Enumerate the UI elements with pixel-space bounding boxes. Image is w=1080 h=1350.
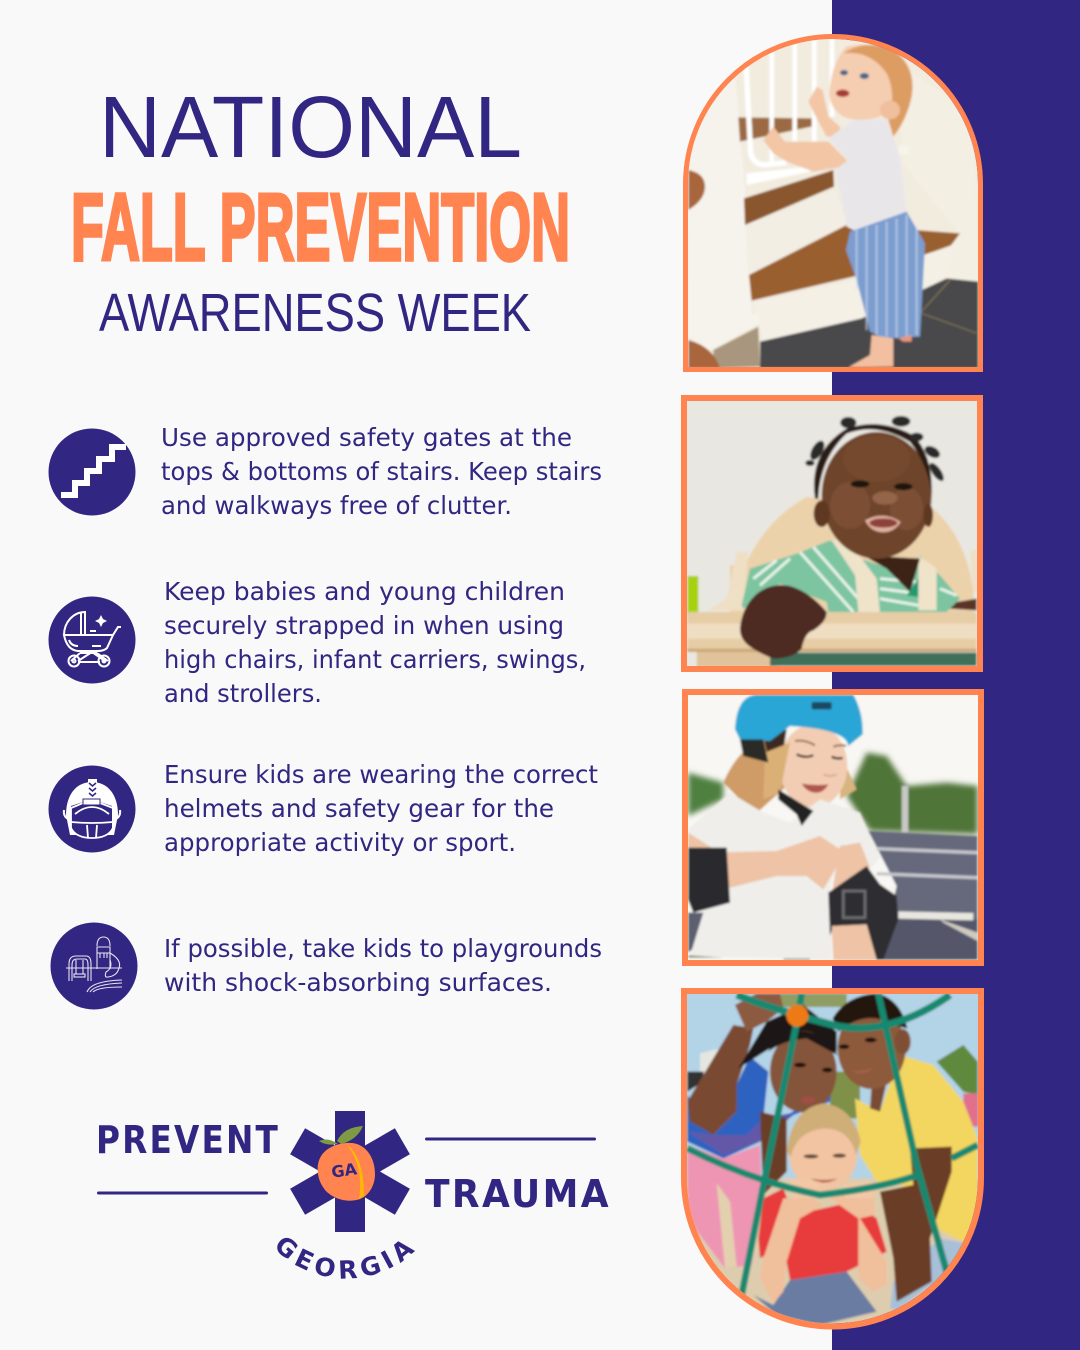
logo word: prevent: PREVENT (96, 1118, 280, 1162)
logo: prevent trauma georgia (96, 1111, 611, 1279)
tip 3 text: appropriate activity or sport. (164, 828, 516, 857)
title line: national: NATIONAL (99, 79, 522, 176)
photo 4 image (687, 994, 978, 1324)
logo star of life (290, 1111, 410, 1232)
tip 4 text: with shock-absorbing surfaces. (164, 968, 552, 997)
tip 4 text: If possible, take kids to playgrounds (164, 934, 602, 963)
photo 3 frame (685, 692, 981, 963)
logo word: georgia: GEORGIA (277, 1238, 415, 1279)
icon: football helmet (48, 766, 136, 852)
photo 2 frame (684, 398, 980, 669)
logo peach (318, 1126, 375, 1201)
photo 1 arch frame (686, 36, 980, 370)
photo 4 arch frame (684, 991, 981, 1326)
tip 1 text: tops & bottoms of stairs. Keep stairs (161, 457, 602, 486)
navy side panel (832, 0, 1080, 1350)
title line: awareness week: AWARENESS WEEK (99, 283, 531, 343)
tip 4: playgrounds (50, 922, 602, 1010)
tip 1 text (161, 423, 602, 520)
tip 2: strapped in (48, 577, 586, 708)
logo peach: GA (330, 1159, 359, 1182)
photo 3: child with helmet and elbow pads (680, 686, 990, 971)
photo 1 image (688, 39, 978, 367)
photo 3 image (688, 695, 978, 960)
tip 2 text (164, 577, 586, 708)
tip 3 text (164, 760, 598, 857)
tip 2 text: high chairs, infant carriers, swings, (164, 645, 586, 674)
logo word: georgia (277, 1238, 415, 1279)
icon: stairs (48, 428, 136, 516)
tip 1: safety gates (48, 423, 602, 520)
icon: playground (50, 922, 138, 1010)
icon: stroller (48, 596, 136, 684)
tip 4 text (164, 934, 602, 997)
tip 3 text: Ensure kids are wearing the correct (164, 760, 598, 789)
photo 4: children on rope net (680, 985, 990, 1335)
tip 2 text: Keep babies and young children (164, 577, 565, 606)
tip 3 text: helmets and safety gear for the (164, 794, 554, 823)
photo 1: toddler at stair gate (680, 30, 990, 375)
tip 1 text: and walkways free of clutter. (161, 491, 512, 520)
tip 3: helmets (48, 760, 598, 857)
title (71, 79, 570, 343)
tip 1 text: Use approved safety gates at the (161, 423, 572, 452)
tip 2 text: securely strapped in when using (164, 611, 564, 640)
photo 2 image (687, 401, 977, 666)
title line: fall prevention: FALL PREVENTION (71, 174, 570, 281)
tip 2 text: and strollers. (164, 679, 322, 708)
photo 2: smiling baby in high chair (680, 392, 990, 677)
logo word: trauma: TRAUMA (425, 1172, 611, 1216)
